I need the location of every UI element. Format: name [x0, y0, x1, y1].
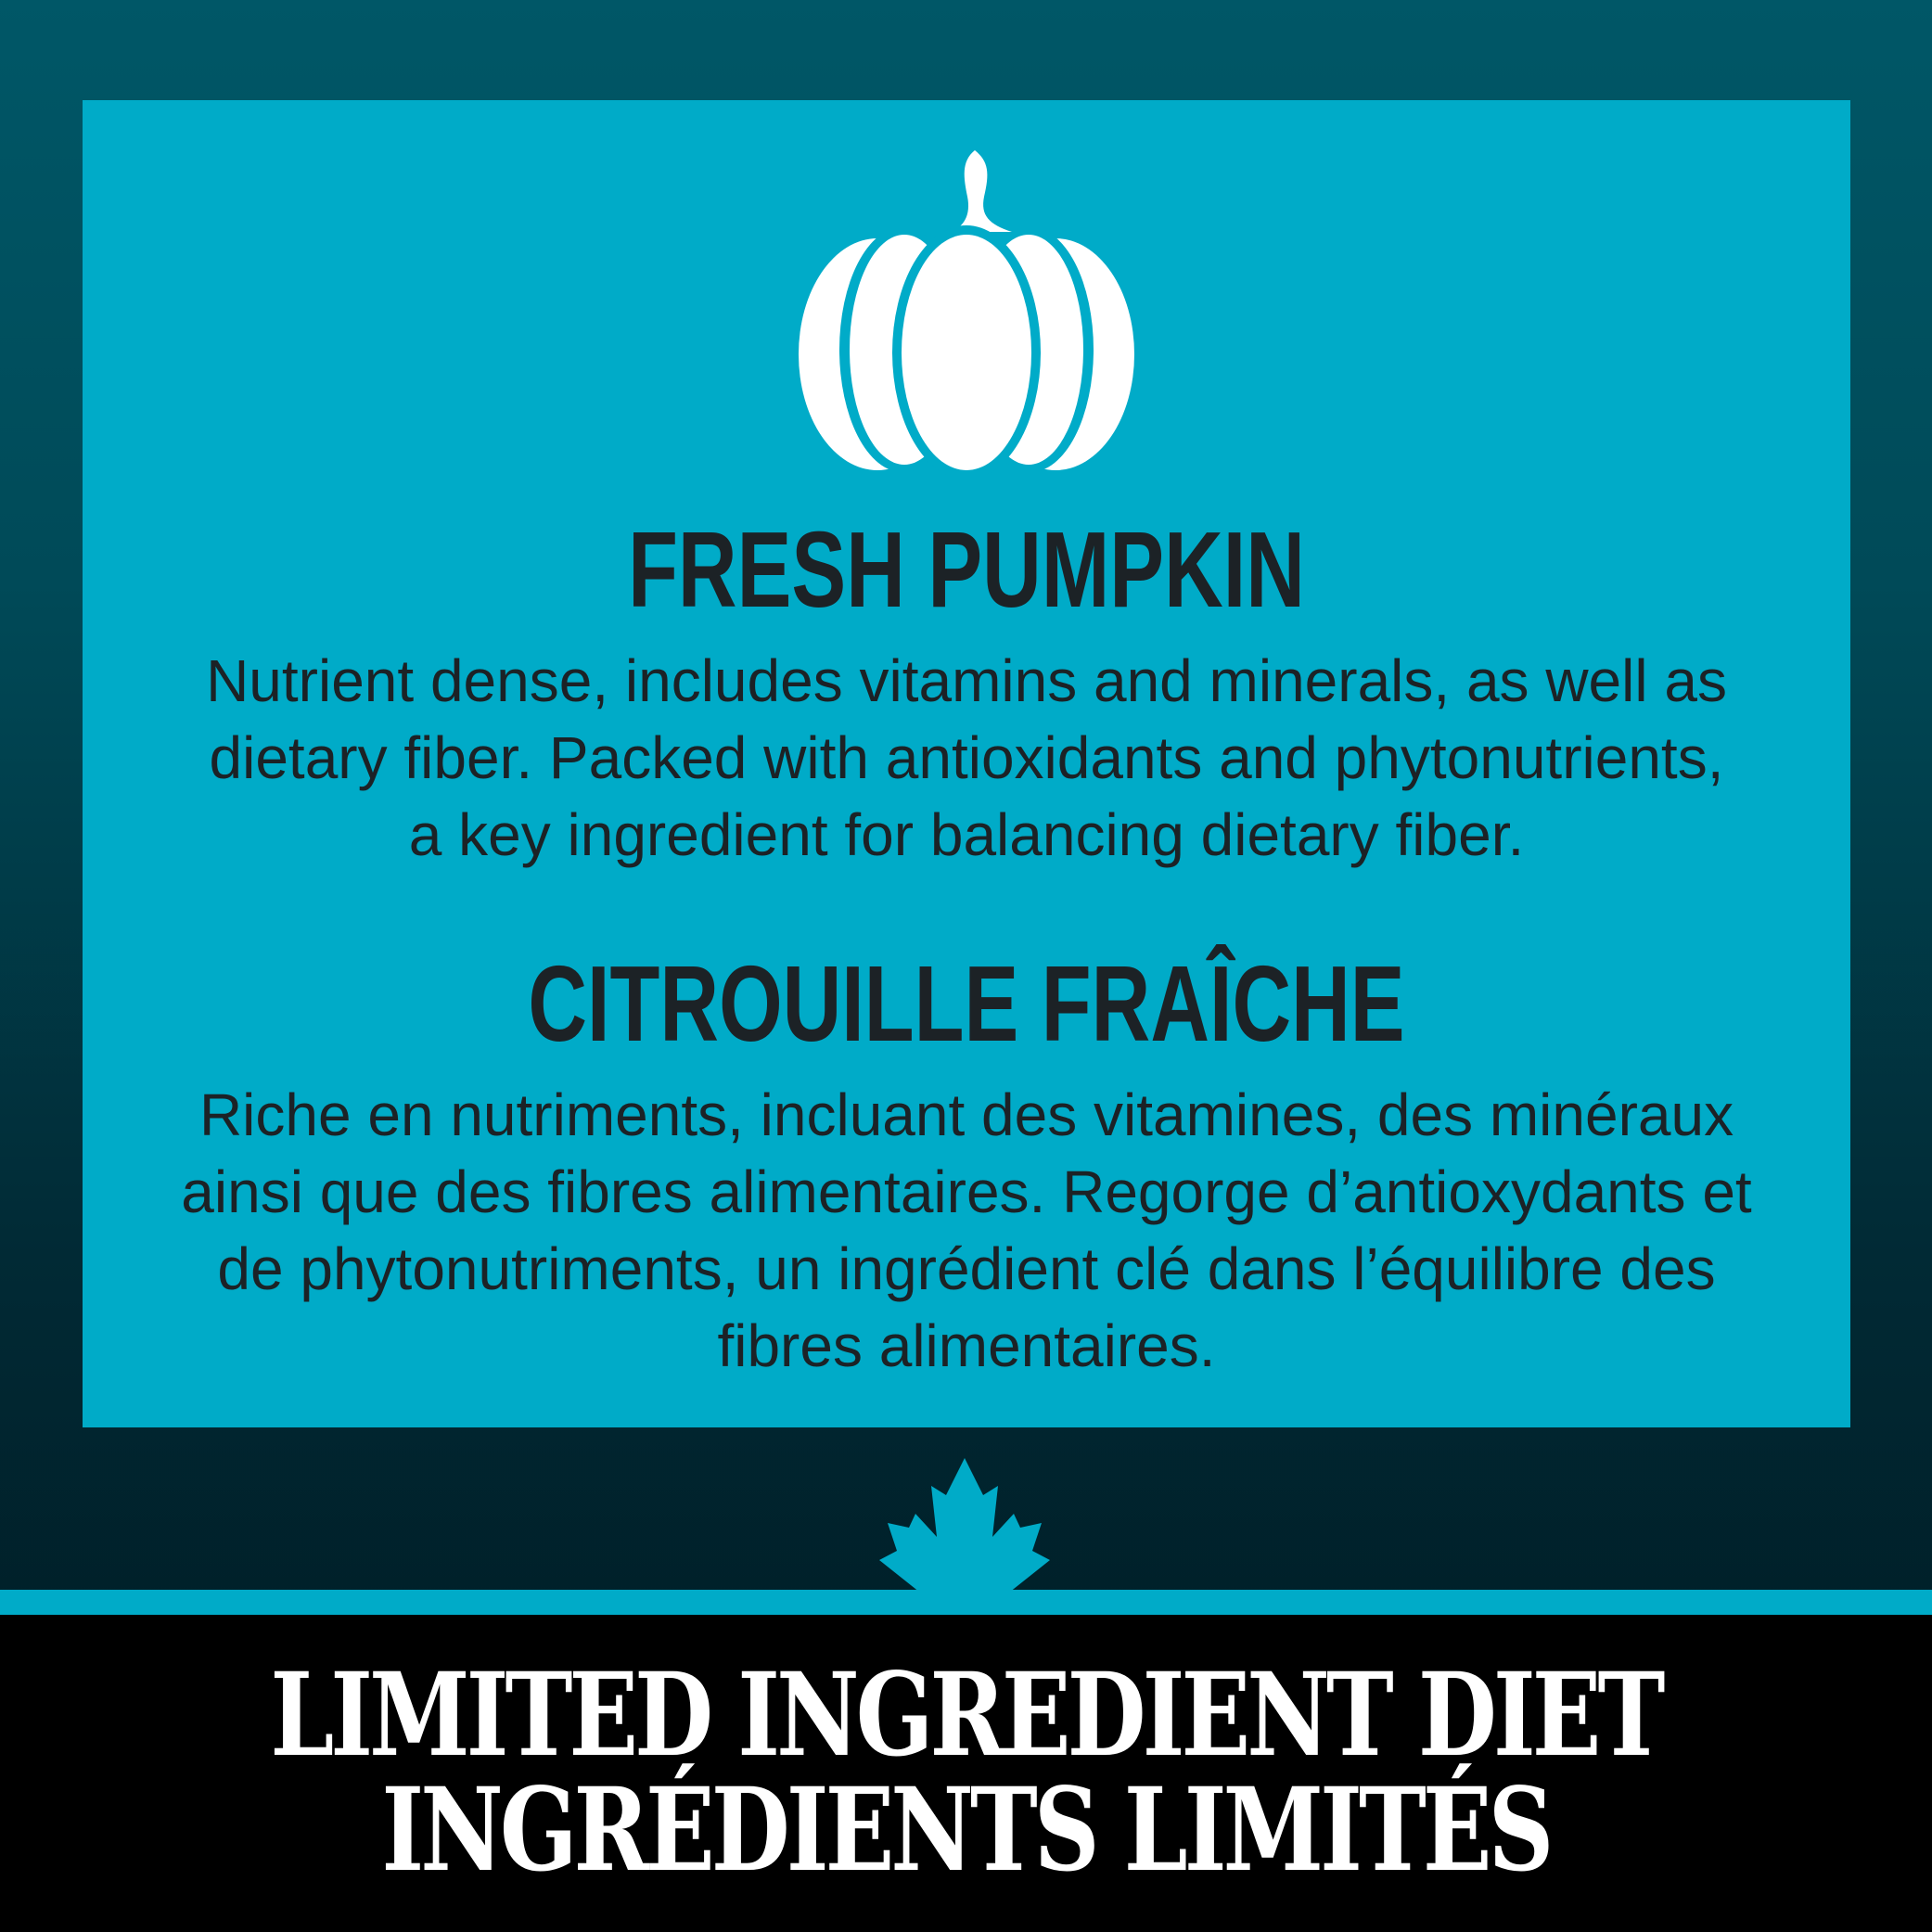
- text: french description: [181, 1081, 1752, 1379]
- title: english: FRESH PUMPKIN: [628, 509, 1305, 630]
- footer text french: INGRÉDIENTS LIMITÉS: [381, 1763, 1550, 1898]
- title: french: CITROUILLE FRAÎCHE: [528, 943, 1405, 1064]
- text: english description: a key ingredient for balancing dietary fiber.: [409, 801, 1524, 868]
- text: french description: Riche en nutriments, incluant des vitamines, des minéraux: [199, 1081, 1734, 1148]
- panel: fresh pumpkin: [83, 100, 1850, 1427]
- text: english description: [206, 647, 1727, 868]
- icon: pumpkin: [799, 150, 1134, 470]
- stripe: [0, 1590, 1932, 1615]
- text: french description: ainsi que des fibres alimentaires. Regorge d’antioxydants et: [181, 1158, 1752, 1225]
- text: english description: dietary fiber. Packed with antioxidants and phytonutrients,: [210, 724, 1723, 791]
- icon: maple leaf: [879, 1458, 1050, 1590]
- text: french description: fibres alimentaires.: [717, 1312, 1216, 1379]
- text: english description: Nutrient dense, includes vitamins and minerals, as well as: [206, 647, 1727, 714]
- footer text english: LIMITED INGREDIENT DIET: [270, 1648, 1661, 1783]
- text: french description: de phytonutriments, un ingrédient clé dans l’équilibre des: [217, 1235, 1716, 1302]
- footer banner: [0, 1615, 1932, 1932]
